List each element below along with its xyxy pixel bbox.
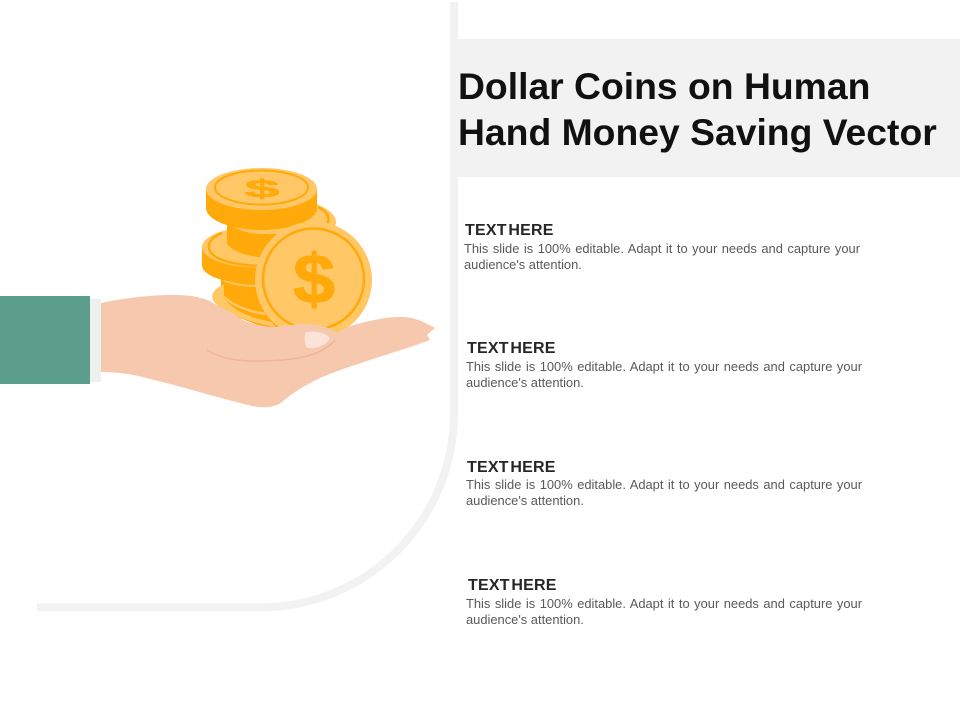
- text block 3 heading: TEXT HERE: [467, 459, 556, 476]
- curved divider: [37, 2, 454, 608]
- upper right coin: [227, 200, 336, 258]
- text block 4 body: This slide is 100% editable. Adapt it to your needs and capture your audience's attention.: [466, 596, 862, 627]
- text block 1 heading: TEXT HERE: [465, 222, 554, 239]
- title: Dollar Coins on Human: [458, 65, 870, 107]
- bottom coin: [212, 268, 300, 330]
- title: Hand Money Saving Vector: [458, 111, 937, 153]
- middle left coin: [202, 226, 312, 284]
- text block 1 body: This slide is 100% editable. Adapt it to your needs and capture your audience's attention.: [464, 241, 860, 272]
- icon: sleeve: [0, 296, 90, 384]
- text block 3 body: This slide is 100% editable. Adapt it to your needs and capture your audience's attention.: [466, 477, 862, 508]
- header band: [458, 39, 960, 177]
- text block 4 heading: TEXT HERE: [468, 577, 557, 594]
- text block 2 body: This slide is 100% editable. Adapt it to your needs and capture your audience's attention.: [466, 359, 862, 390]
- thumb crease: [207, 340, 335, 361]
- top coin: [206, 168, 317, 230]
- icon: open hand: [101, 295, 435, 407]
- icon: shirt cuff: [90, 299, 101, 382]
- icon: large dollar coin: $: [293, 241, 335, 318]
- title: [458, 65, 937, 153]
- icon: coin stack: [202, 168, 336, 330]
- top coin: $: [244, 175, 280, 203]
- text block 2 heading: TEXT HERE: [467, 340, 556, 357]
- icon: large dollar coin: [255, 222, 372, 338]
- thumbnail: [305, 332, 330, 348]
